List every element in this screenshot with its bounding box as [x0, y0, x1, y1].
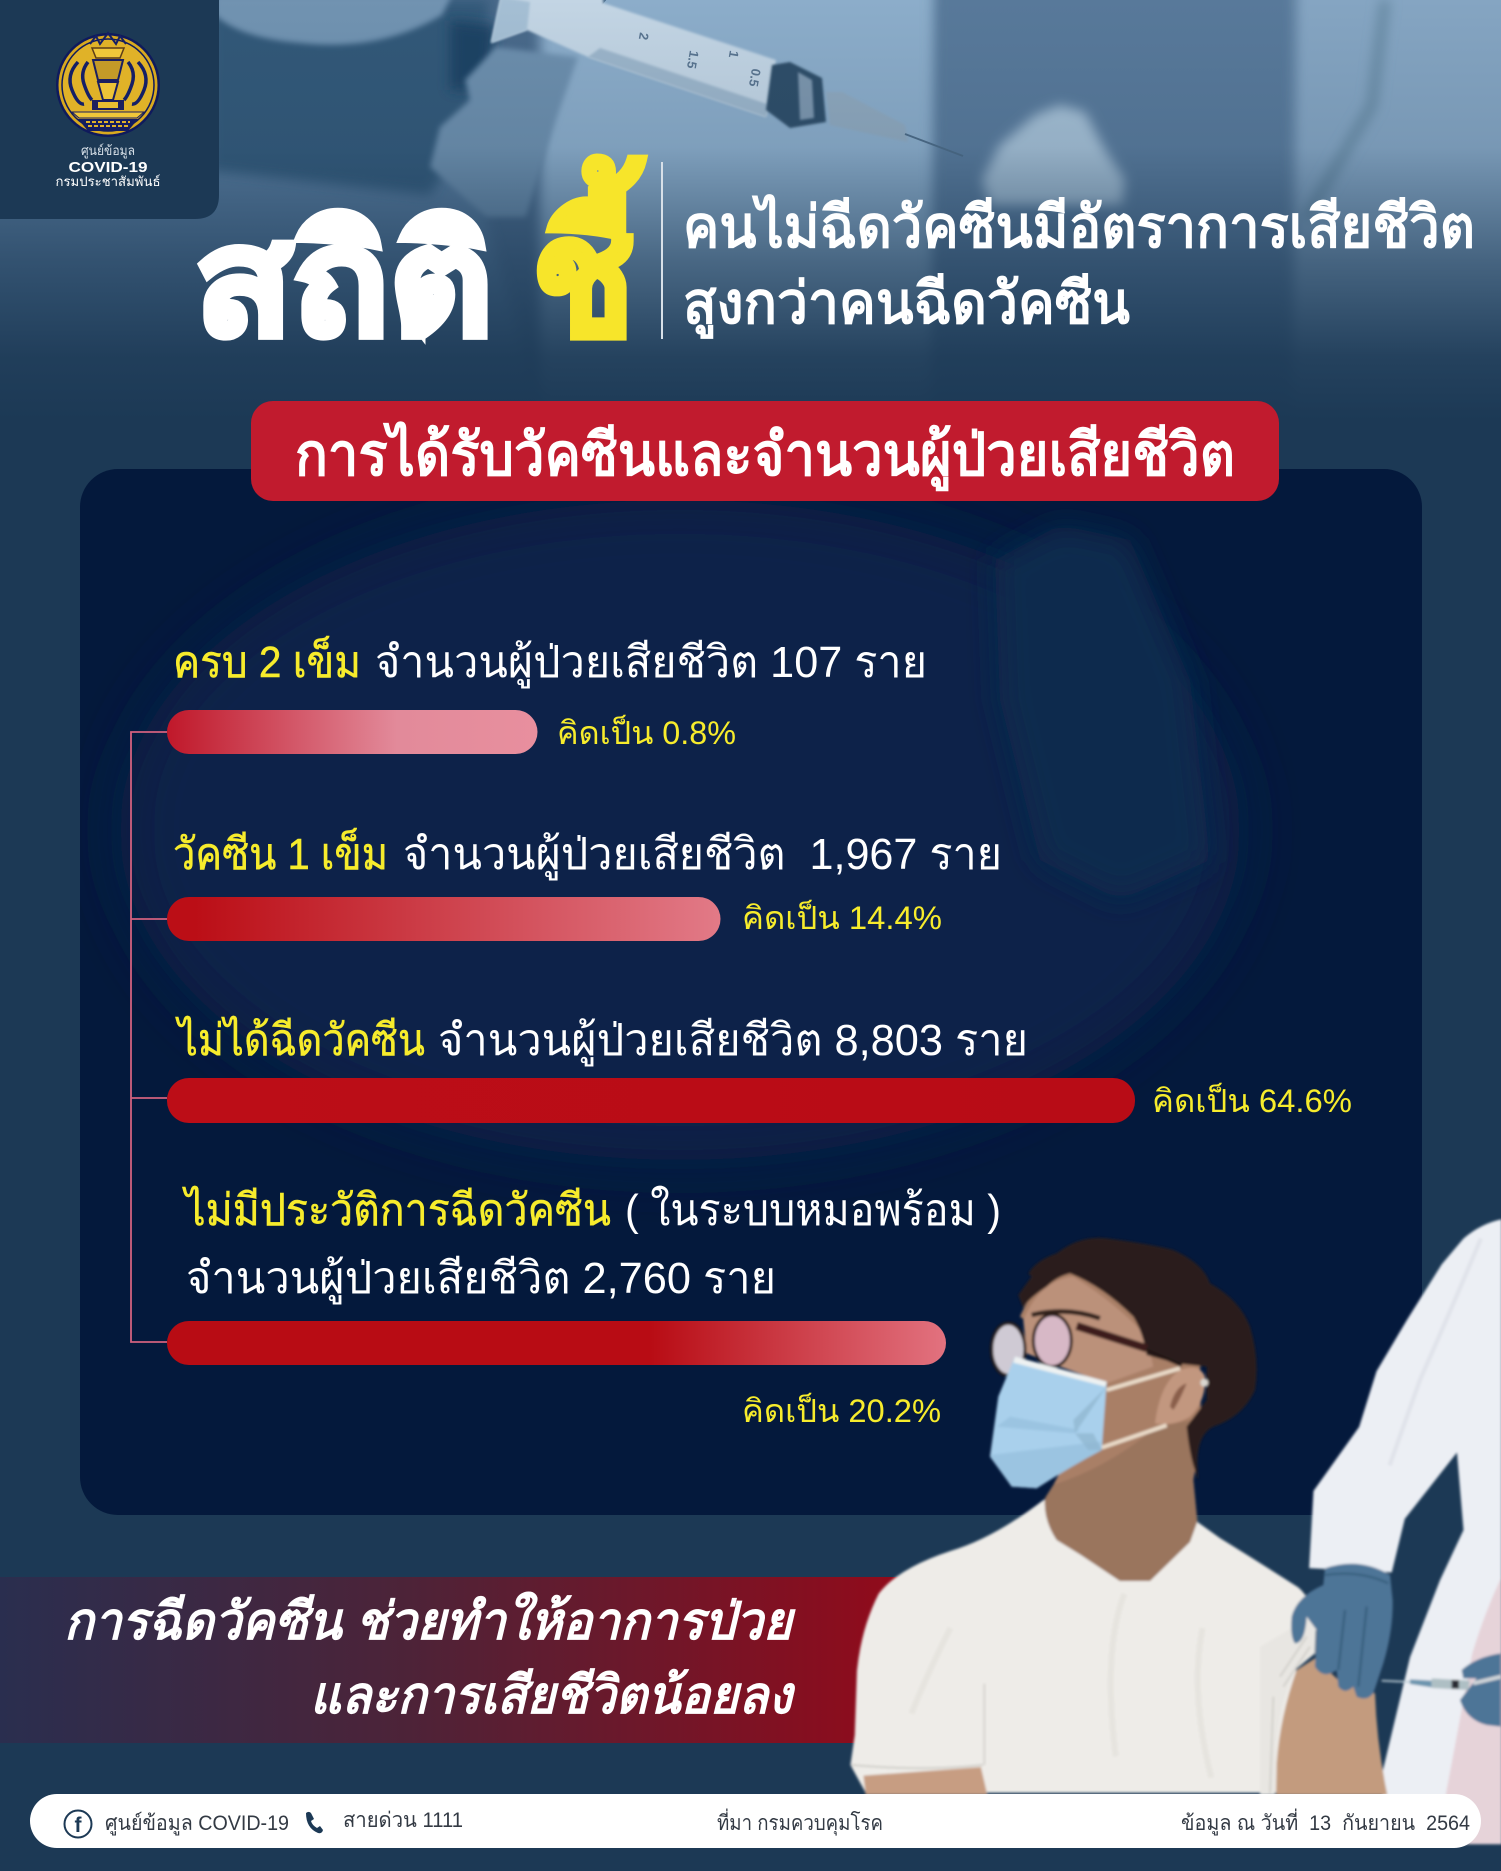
row 1: two doses: ครบ 2 เข็ม	[173, 636, 361, 687]
eyebrow	[1032, 1312, 1100, 1318]
glasses	[992, 1315, 1071, 1375]
bar: 64.6%	[167, 1078, 1135, 1123]
surgical mask	[990, 1357, 1107, 1488]
ear	[1155, 1368, 1205, 1424]
arm and glove layer	[1260, 1564, 1501, 1795]
bar: 14.4%	[167, 897, 720, 941]
neck and face skin	[1020, 1270, 1201, 1581]
rolled sleeve	[1260, 1613, 1317, 1795]
footer bar: ที่มา กรมควบคุมโรค	[717, 1808, 883, 1836]
icon: government seal	[56, 33, 160, 137]
bar: 0.8%	[167, 710, 538, 754]
value: 64.6%: คิดเป็น 64.6%	[1152, 1082, 1352, 1119]
background photo: injection	[0, 0, 1501, 366]
section heading pill	[251, 401, 1279, 501]
cotton ball	[982, 105, 1125, 205]
row 3: unvaccinated: ไม่ได้ฉีดวัคซีน	[175, 1015, 425, 1065]
value: 14.4%: คิดเป็น 14.4%	[742, 899, 942, 936]
icon: phone	[306, 1812, 323, 1833]
row 1: two doses	[167, 636, 927, 754]
subtitle: สูงกว่าคนฉีดวัคซีน	[683, 271, 1130, 339]
logo panel	[0, 0, 219, 219]
photo: doctor and patient	[850, 1219, 1501, 1844]
value: 0.8%: คิดเป็น 0.8%	[557, 714, 736, 751]
value: 20.2%: คิดเป็น 20.2%	[742, 1392, 941, 1429]
row 2: one dose: จำนวนผู้ป่วยเสียชีวิต 1,967 ราย	[403, 830, 1002, 881]
doctor syringe	[1382, 1681, 1410, 1682]
connector lines	[131, 732, 167, 1342]
syringe: 1.5	[684, 49, 702, 70]
row 3: unvaccinated	[167, 1015, 1352, 1123]
mask straps	[1102, 1368, 1180, 1448]
syringe: 0.5	[746, 67, 764, 88]
row 2: one dose	[167, 828, 1002, 941]
section heading pill: การได้รับวัคซีนและจำนวนผู้ป่วยเสียชีวิต	[295, 420, 1235, 491]
logo caption: ศูนย์ข้อมูล	[81, 143, 135, 159]
logo caption: กรมประชาสัมพันธ์	[56, 174, 160, 189]
title: สถิติ	[195, 198, 493, 366]
doctor coat	[1309, 1219, 1501, 1844]
syringe: 1	[726, 49, 742, 59]
title divider	[661, 162, 663, 339]
bottom message banner	[0, 1577, 910, 1743]
patient arm	[1276, 1658, 1387, 1795]
logo caption: COVID-19	[68, 159, 148, 176]
title	[195, 156, 645, 371]
subtitle	[683, 194, 1475, 339]
footer bar: ข้อมูล ณ วันที่ 13 กันยายน 2564	[1181, 1808, 1470, 1836]
row 4: no record	[167, 1185, 1001, 1429]
row 1: two doses: จำนวนผู้ป่วยเสียชีวิต 107 ราย	[375, 638, 927, 689]
patient shirt	[850, 1500, 1318, 1793]
logo caption	[56, 143, 160, 189]
head layer	[990, 1238, 1257, 1581]
row 4: no record: ( ในระบบหมอพร้อม )	[625, 1185, 1001, 1235]
syringe	[491, 0, 963, 156]
footer bar: ศูนย์ข้อมูล COVID-19	[105, 1811, 289, 1836]
bar: 20.2%	[167, 1321, 946, 1365]
row 4: no record: จำนวนผู้ป่วยเสียชีวิต 2,760 ราย	[186, 1254, 776, 1305]
body layer	[850, 1219, 1501, 1844]
main dark panel	[80, 469, 1422, 1515]
row 3: unvaccinated: จำนวนผู้ป่วยเสียชีวิต 8,803 ราย	[438, 1016, 1028, 1067]
bottom message banner: การฉีดวัคซีน ช่วยทำให้อาการป่วย	[64, 1591, 796, 1651]
footer bar	[30, 1794, 1481, 1848]
icon: facebook	[64, 1810, 92, 1838]
row 4: no record: ไม่มีประวัติการฉีดวัคซีน	[182, 1185, 611, 1235]
icon: facebook: f	[74, 1814, 82, 1837]
syringe: 2	[636, 31, 652, 41]
doctor second glove	[1460, 1653, 1501, 1727]
bottom message banner: และการเสียชีวิตน้อยลง	[310, 1667, 795, 1725]
row 2: one dose: วัคซีน 1 เข็ม	[173, 828, 388, 879]
doctor glove	[1291, 1564, 1393, 1699]
title: ชี้	[532, 156, 645, 371]
footer bar: สายด่วน 1111	[343, 1809, 463, 1832]
hair	[1018, 1238, 1257, 1480]
